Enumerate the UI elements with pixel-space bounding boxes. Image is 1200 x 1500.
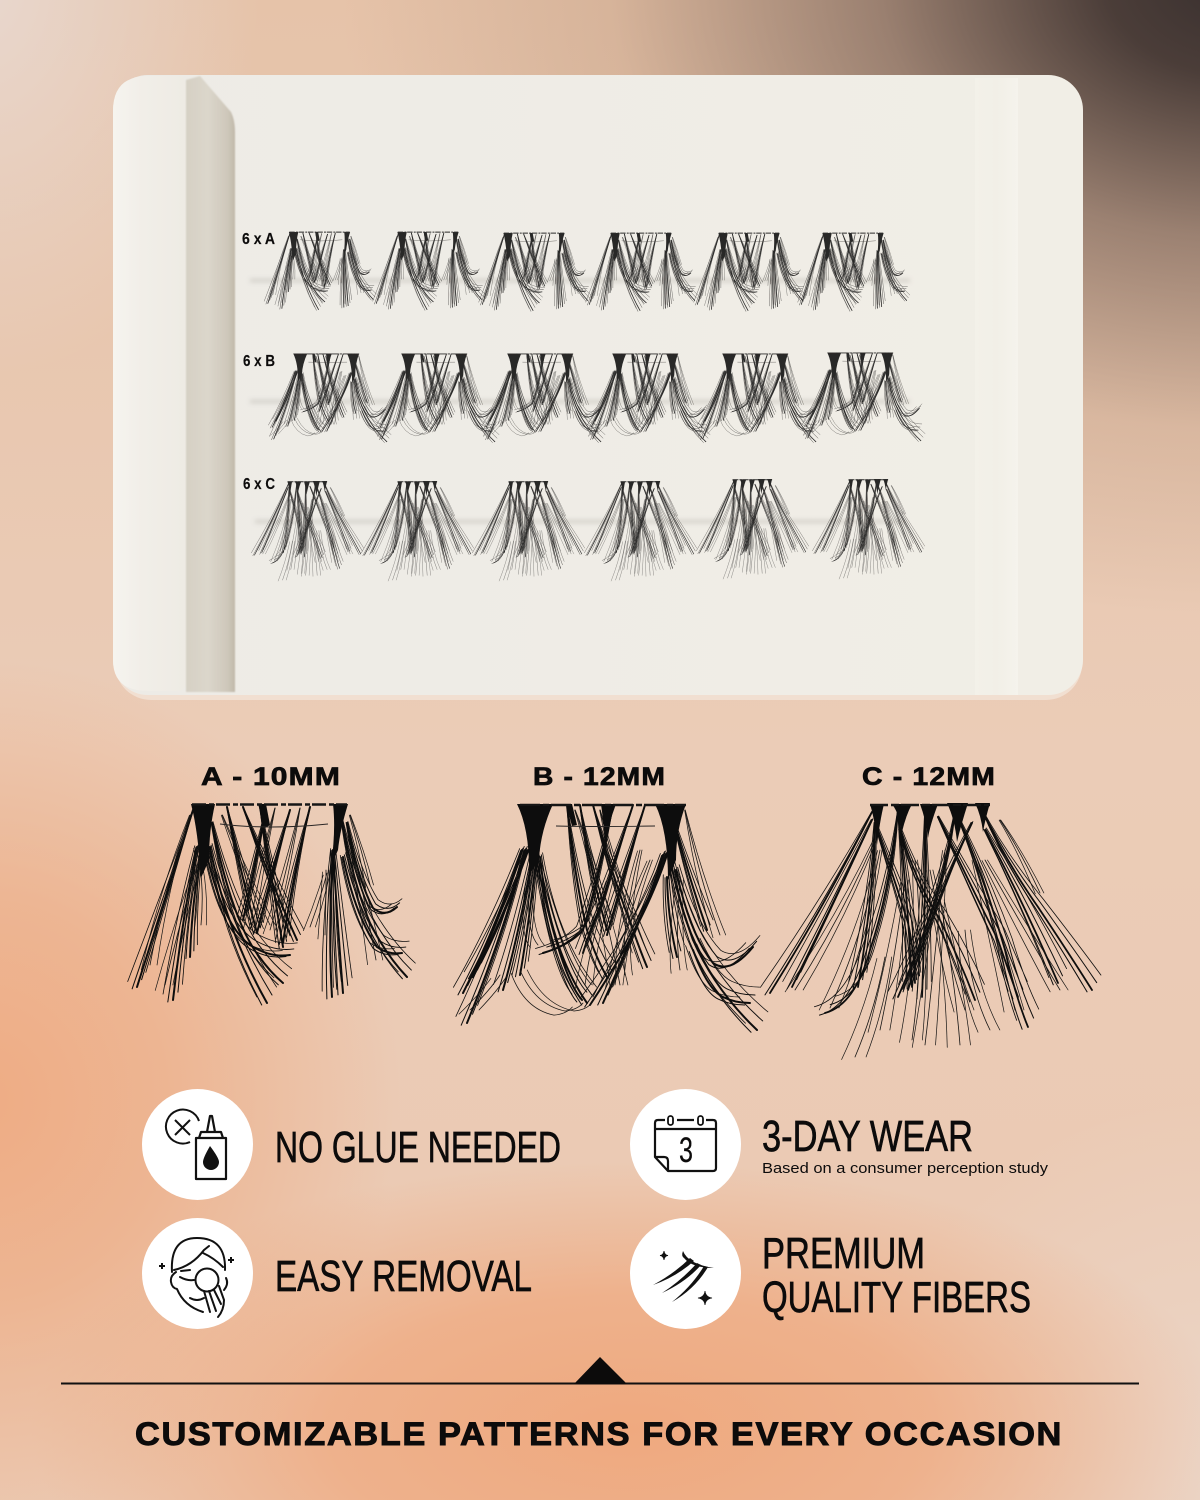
feature: 3-day wear xyxy=(630,1089,1049,1200)
label: 3-day wear: 3-DAY WEAR xyxy=(762,1112,973,1161)
heading: A - 10MM: A - 10MM xyxy=(201,763,341,791)
icon: face with cleansing pad xyxy=(142,1218,253,1329)
divider with triangle pointer xyxy=(61,1357,1139,1384)
tray groove xyxy=(186,76,235,692)
tray lash row B xyxy=(268,353,925,443)
heading: C - 12MM: C - 12MM xyxy=(862,763,996,791)
label: easy removal: EASY REMOVAL xyxy=(275,1252,532,1301)
feature: premium quality fibers xyxy=(630,1218,1031,1329)
lash B close-up xyxy=(452,804,768,1032)
tray right band xyxy=(975,78,1018,695)
lash A close-up xyxy=(127,804,417,1005)
icon: lash with sparkles xyxy=(630,1218,741,1329)
product tray xyxy=(113,75,1083,700)
tray label 6xC: 6 x C xyxy=(243,476,275,493)
tray lash row A xyxy=(264,232,910,311)
heading: B - 12MM: B - 12MM xyxy=(533,763,666,791)
icon: calendar: 3 xyxy=(679,1131,693,1170)
label: no glue needed: NO GLUE NEEDED xyxy=(275,1123,561,1172)
feature: easy removal xyxy=(142,1218,532,1329)
icon: calendar xyxy=(630,1089,741,1200)
feature: no glue needed xyxy=(142,1089,561,1200)
tray left grip xyxy=(113,76,186,691)
lash C close-up xyxy=(759,803,1103,1060)
icon: no glue bottle xyxy=(142,1089,253,1200)
tray label 6xB: 6 x B xyxy=(243,353,275,370)
tray label 6xA: 6 x A xyxy=(242,231,275,248)
label: quality fibers: QUALITY FIBERS xyxy=(762,1273,1031,1322)
tray lash row C xyxy=(251,479,925,581)
footer headline: CUSTOMIZABLE PATTERNS FOR EVERY OCCASION xyxy=(135,1416,1063,1452)
label: premium: PREMIUM xyxy=(762,1229,925,1278)
note: consumer perception study: Based on a consumer perception study xyxy=(762,1160,1049,1177)
